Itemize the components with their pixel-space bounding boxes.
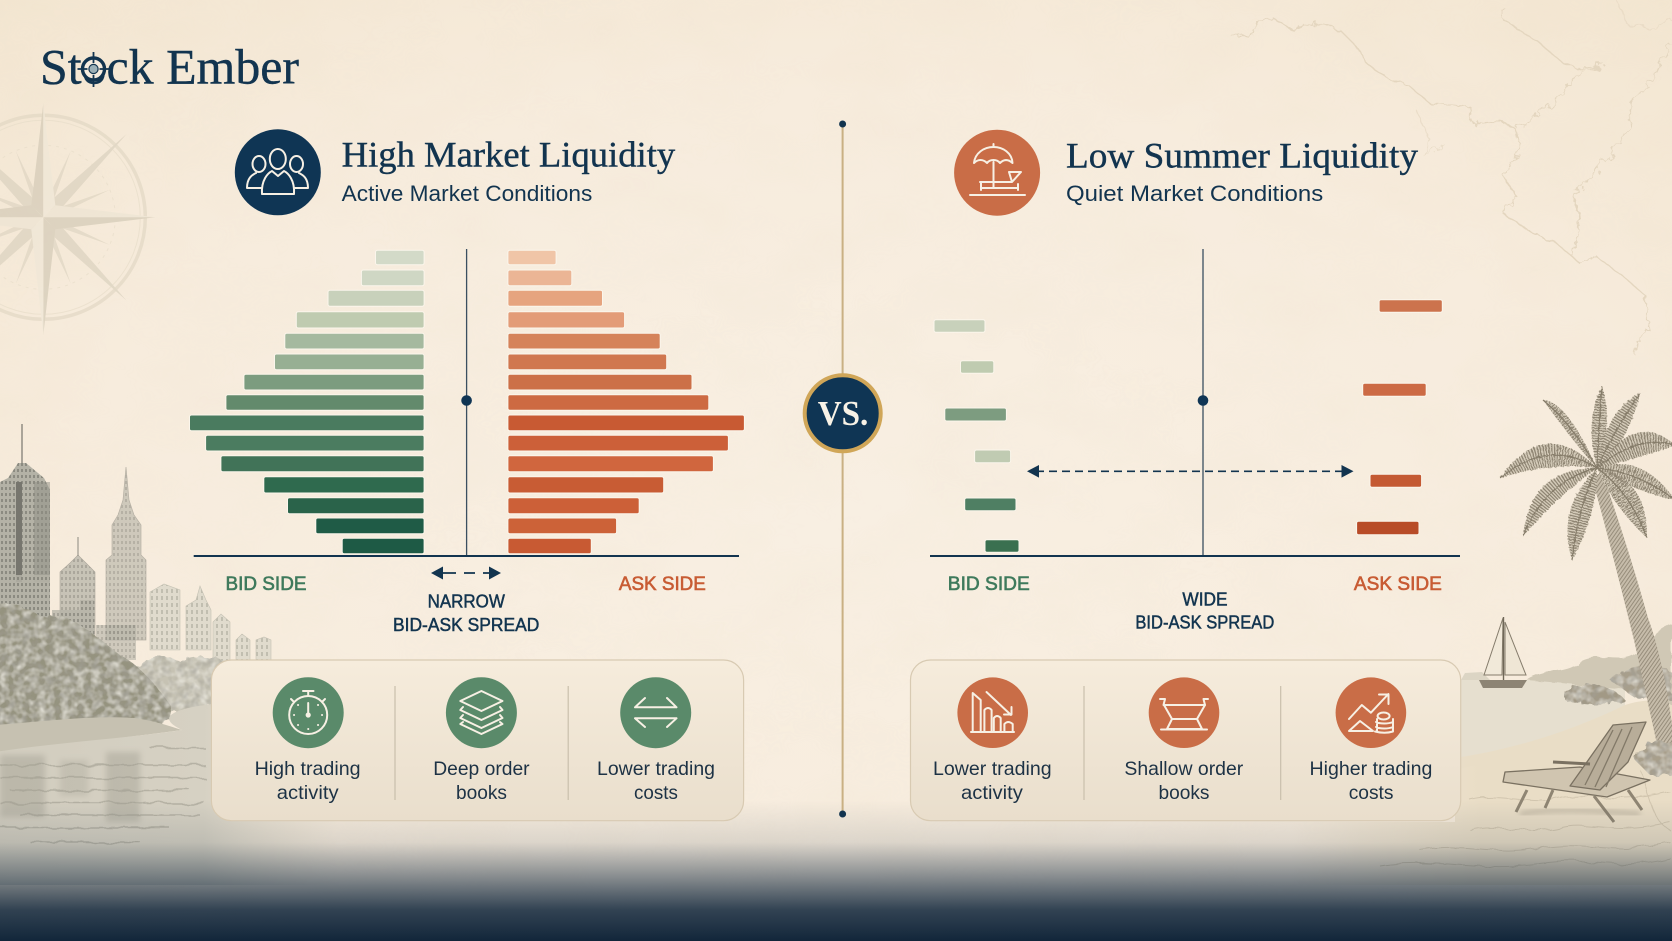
- shrubs on shore: [1565, 684, 1625, 704]
- trait: higher trading costs: [1310, 677, 1432, 804]
- arrow: wide spread: [1027, 465, 1354, 478]
- trait: high trading activity: [255, 677, 361, 804]
- panel: low liquidity traits: [910, 660, 1461, 821]
- arrow: narrow spread: [431, 566, 501, 580]
- center divider with VS badge: [805, 120, 881, 818]
- VS badge: VS.: [818, 394, 868, 433]
- label: ask side: ASK SIDE: [1354, 574, 1442, 595]
- bid bars: [934, 320, 1019, 552]
- trait: shallow order books: [1124, 677, 1244, 804]
- panel: high liquidity traits: [211, 660, 744, 821]
- mid tower: [60, 537, 95, 650]
- label: ask side: ASK SIDE: [619, 574, 706, 595]
- label: bid side: BID SIDE: [948, 574, 1030, 595]
- ask bars: [508, 250, 744, 554]
- label: wide bid-ask spread: [1135, 589, 1274, 632]
- logo: Stock Ember: Stock Ember: [40, 38, 299, 94]
- subheading: Quiet Market Conditions: [1066, 181, 1323, 206]
- river: [0, 704, 340, 885]
- heading: High Market Liquidity: [342, 135, 675, 175]
- mid-price line and dot: [1198, 249, 1208, 556]
- trait: deep order books: books: [456, 782, 507, 804]
- sailboat: [1479, 617, 1527, 688]
- illustration: beach with palm, boat and lounge chair: [1360, 386, 1672, 884]
- baseline: [194, 555, 739, 557]
- trait: lower trading activity: activity: [961, 782, 1023, 804]
- bottom navy fade: [0, 800, 1672, 941]
- label: narrow bid-ask spread: [393, 591, 539, 635]
- label: wide bid-ask spread: WIDE: [1182, 589, 1228, 610]
- chart: low liquidity order book: [930, 249, 1460, 632]
- icon: people: [235, 129, 321, 215]
- icon: compass in logo: [78, 52, 110, 87]
- bid bars: [190, 250, 424, 554]
- sand: [1290, 700, 1672, 885]
- lounge chair: [1503, 722, 1650, 822]
- trait: higher trading costs: Higher trading: [1310, 758, 1432, 780]
- art deco tower: [106, 467, 146, 640]
- label: bid side: BID SIDE: [226, 574, 306, 595]
- mid-price line and dot: [461, 249, 472, 556]
- low blocks: [52, 600, 94, 660]
- decoration: compass rose: [0, 103, 155, 335]
- baseline: [930, 555, 1460, 557]
- illustration: city skyline by the river: [0, 424, 340, 885]
- trait: high trading activity: activity: [277, 782, 339, 804]
- ask bars: [1357, 300, 1442, 535]
- icon: beach umbrella: [954, 130, 1040, 216]
- near trees: [0, 604, 172, 736]
- label: wide bid-ask spread: BID-ASK SPREAD: [1135, 611, 1274, 632]
- trait: deep order books: [433, 677, 530, 804]
- river reflections: [0, 748, 205, 842]
- heading: Low Summer Liquidity: [1066, 135, 1418, 175]
- trait: lower trading activity: [933, 677, 1052, 804]
- mountains: [1527, 623, 1672, 705]
- VS badge: [805, 375, 881, 451]
- palm base foliage: [1635, 742, 1672, 775]
- distant buildings: [150, 584, 271, 690]
- trait: lower trading activity: Lower trading: [933, 758, 1052, 780]
- chart: high liquidity order book: [190, 249, 744, 635]
- trait: lower trading costs: [597, 677, 715, 804]
- trait: high trading activity: High trading: [255, 758, 361, 780]
- section header: Low Summer Liquidity: [954, 130, 1418, 216]
- trait: shallow order books: Shallow order: [1124, 758, 1244, 780]
- tower with stepped crown: [0, 424, 50, 645]
- trait: shallow order books: books: [1158, 782, 1210, 804]
- palm fronds: [1500, 386, 1672, 560]
- subheading: Active Market Conditions: [342, 181, 592, 206]
- sea: [1455, 680, 1625, 770]
- trait: lower trading costs: costs: [634, 782, 678, 804]
- land spit: [0, 717, 182, 755]
- trait: deep order books: Deep order: [433, 758, 530, 780]
- label: narrow bid-ask spread: BID-ASK SPREAD: [393, 614, 539, 635]
- far tree line: [125, 656, 262, 713]
- trait: lower trading costs: Lower trading: [597, 758, 715, 780]
- section header: High Market Liquidity: [235, 129, 675, 215]
- palm trunk: [1592, 472, 1672, 758]
- trait: higher trading costs: costs: [1349, 782, 1394, 804]
- label: narrow bid-ask spread: NARROW: [428, 591, 505, 612]
- decoration: map contours top right: [1232, 0, 1672, 353]
